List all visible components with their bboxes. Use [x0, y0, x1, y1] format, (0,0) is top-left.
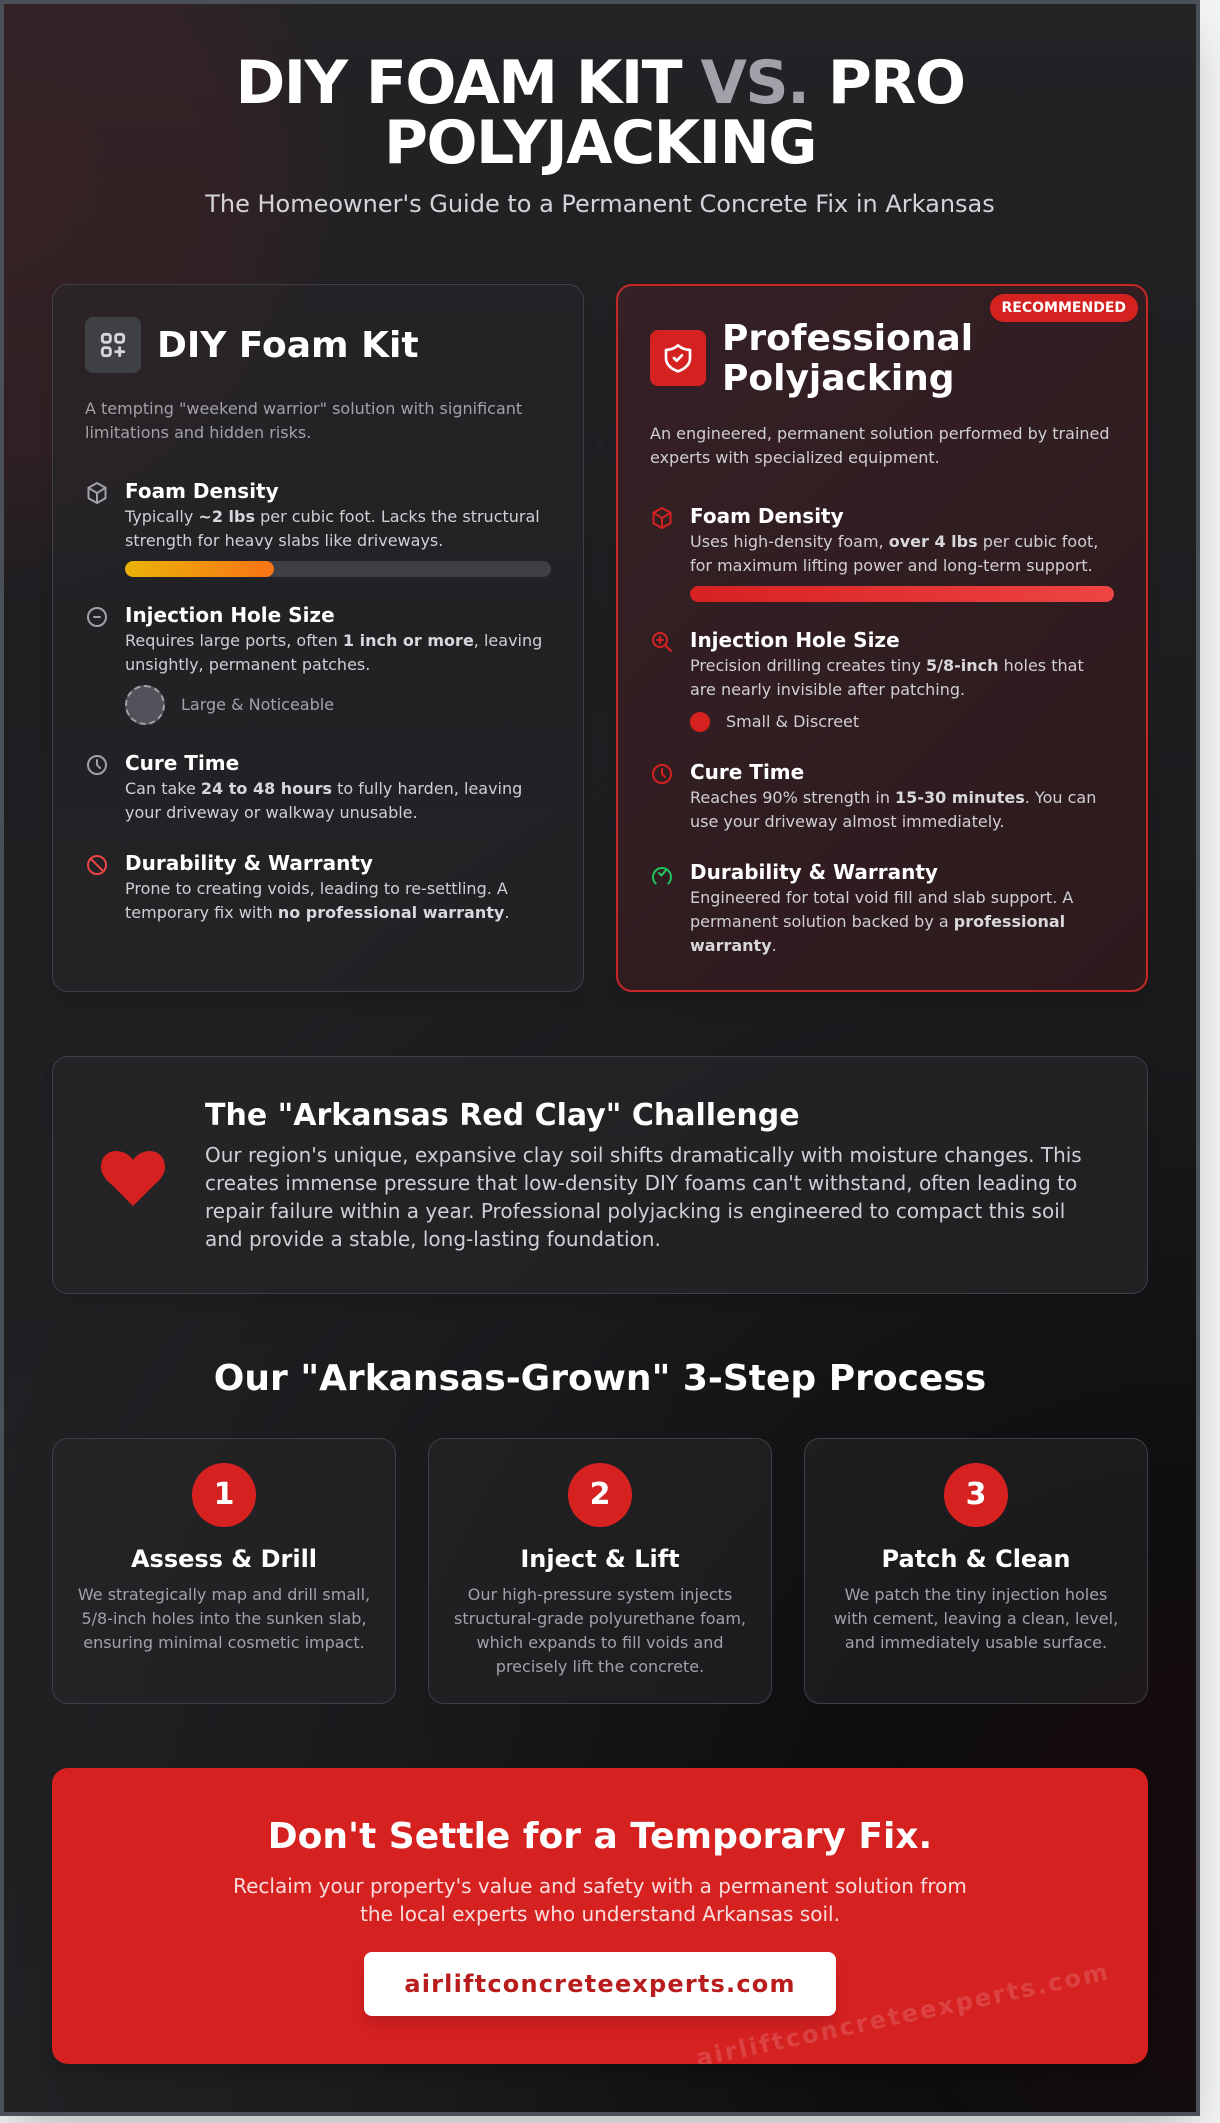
subtitle: The Homeowner's Guide to a Permanent Concrete Fix in Arkansas	[205, 190, 995, 218]
step 3: We patch the tiny injection holes with cement, leaving a clean, level, and immediately usable surface.	[834, 1585, 1118, 1652]
DIY feature: foam density: Foam Density	[125, 479, 279, 503]
recommended badge	[990, 294, 1138, 322]
pro feature: cure time	[652, 760, 1096, 831]
step 2: Our high-pressure system injects structural-grade polyurethane foam, which expands to fill voids and precisely lift the concrete.	[454, 1585, 746, 1676]
panel: DIY foam kit	[52, 284, 584, 992]
step number 2: 2	[590, 1477, 610, 1512]
icon: heart	[101, 1151, 165, 1206]
pro feature: foam density: Foam Density	[690, 504, 844, 528]
step number 2	[568, 1463, 632, 1527]
large hole indicator: Large & Noticeable	[181, 695, 334, 714]
DIY feature: foam density: Typically ~2 lbs per cubic foot. Lacks the structural strength for heavy slabs like driveways.	[125, 507, 540, 550]
pro feature: durability and warranty	[652, 860, 1074, 955]
header	[205, 48, 995, 218]
small hole indicator: Small & Discreet	[726, 712, 859, 731]
DIY description: A tempting "weekend warrior" solution with significant limitations and hidden risks.	[85, 399, 522, 442]
call to action banner	[52, 1768, 1148, 2064]
website button: airliftconcreteexperts.com	[404, 1970, 796, 1998]
panel: Arkansas red clay challenge	[52, 1056, 1148, 1294]
DIY card heading: DIY Foam Kit	[157, 325, 419, 366]
recommended badge: RECOMMENDED	[1002, 300, 1126, 316]
DIY feature: durability and warranty: Durability & Warranty	[125, 851, 373, 875]
three-step process	[52, 1438, 1148, 1704]
step 2	[428, 1438, 772, 1704]
pro description: An engineered, permanent solution performed by trained experts with specialized equipment.	[650, 424, 1110, 467]
icon: apps add	[85, 317, 141, 373]
pro feature: foam density	[652, 504, 1114, 602]
DIY feature: durability and warranty	[87, 851, 509, 922]
panel: professional polyjacking	[616, 284, 1148, 992]
pro feature: durability and warranty: Durability & Warranty	[690, 860, 938, 884]
DIY feature: injection hole size: Requires large ports, often 1 inch or more, leaving unsightly, permanent patches.	[125, 631, 542, 674]
large hole indicator	[125, 685, 334, 725]
density bar: low	[125, 561, 551, 577]
process heading: Our "Arkansas-Grown" 3-Step Process	[214, 1358, 986, 1399]
step number 3: 3	[966, 1477, 986, 1512]
pro feature: durability and warranty: Engineered for total void fill and slab support. A permanent solution backed by a professional warranty.	[690, 888, 1073, 955]
icon: box	[88, 482, 106, 504]
DIY feature: cure time: Can take 24 to 48 hours to fully harden, leaving your driveway or walkway unusable.	[125, 779, 522, 822]
clay challenge text: The "Arkansas Red Clay" Challenge	[205, 1098, 800, 1133]
icon: magnifier	[652, 632, 672, 652]
DIY feature: injection hole size: Injection Hole Size	[125, 603, 335, 627]
icon: ban	[87, 855, 107, 875]
CTA text	[233, 1874, 967, 1926]
pro feature: foam density: Uses high-density foam, over 4 lbs per cubic foot, for maximum lifting power and long-term support.	[690, 532, 1098, 575]
density bar: high	[690, 586, 1114, 602]
icon: green gauge check	[652, 867, 672, 885]
icon: circle minus	[87, 607, 107, 627]
icon: clock	[87, 755, 107, 775]
pro card heading: Professional Polyjacking	[722, 318, 973, 399]
DIY feature: foam density	[88, 479, 551, 577]
CTA text: Reclaim your property's value and safety with a permanent solution from	[233, 1874, 967, 1898]
pro feature: injection hole size	[652, 628, 1084, 732]
pro feature: cure time: Reaches 90% strength in 15-30 minutes. You can use your driveway almost immediately.	[690, 788, 1096, 831]
icon: clock	[652, 764, 672, 784]
comparison cards	[52, 284, 1148, 992]
pro feature: cure time: Cure Time	[690, 760, 804, 784]
icon: box	[652, 507, 672, 529]
DIY feature: injection hole size	[87, 603, 542, 725]
step 2: Inject & Lift	[520, 1545, 680, 1573]
pro feature: injection hole size: Precision drilling creates tiny 5/8-inch holes that are nearly invisible after patching.	[690, 656, 1084, 699]
step 1: We strategically map and drill small, 5/8-inch holes into the sunken slab, ensuring minimal cosmetic impact.	[78, 1585, 370, 1652]
title: DIY FOAM KIT VS. PRO POLYJACKING	[235, 48, 965, 178]
DIY feature: cure time: Cure Time	[125, 751, 239, 775]
CTA text: the local experts who understand Arkansas soil.	[360, 1902, 840, 1926]
pro feature: injection hole size: Injection Hole Size	[690, 628, 900, 652]
step 3	[804, 1438, 1148, 1704]
step number 3	[944, 1463, 1008, 1527]
step 3: Patch & Clean	[882, 1545, 1070, 1573]
icon: shield check	[650, 330, 706, 386]
step number 1: 1	[214, 1477, 234, 1512]
CTA heading: Don't Settle for a Temporary Fix.	[268, 1816, 932, 1857]
DIY feature: durability and warranty: Prone to creating voids, leading to re-settling. A temporary fix with no professional warranty.	[125, 879, 509, 922]
DIY card heading	[85, 317, 419, 373]
clay challenge text: Our region's unique, expansive clay soil shifts dramatically with moisture changes. This creates immense pressure that low-density DIY foams can't withstand, often leading to repair failure within a year. Professional polyjacking is engineered to compact this soil and provide a stable, long-lasting foundation.	[205, 1143, 1082, 1251]
DIY feature: cure time	[87, 751, 522, 822]
step 1: Assess & Drill	[131, 1545, 317, 1573]
step 1	[52, 1438, 396, 1704]
website button	[364, 1952, 836, 2016]
step number 1	[192, 1463, 256, 1527]
